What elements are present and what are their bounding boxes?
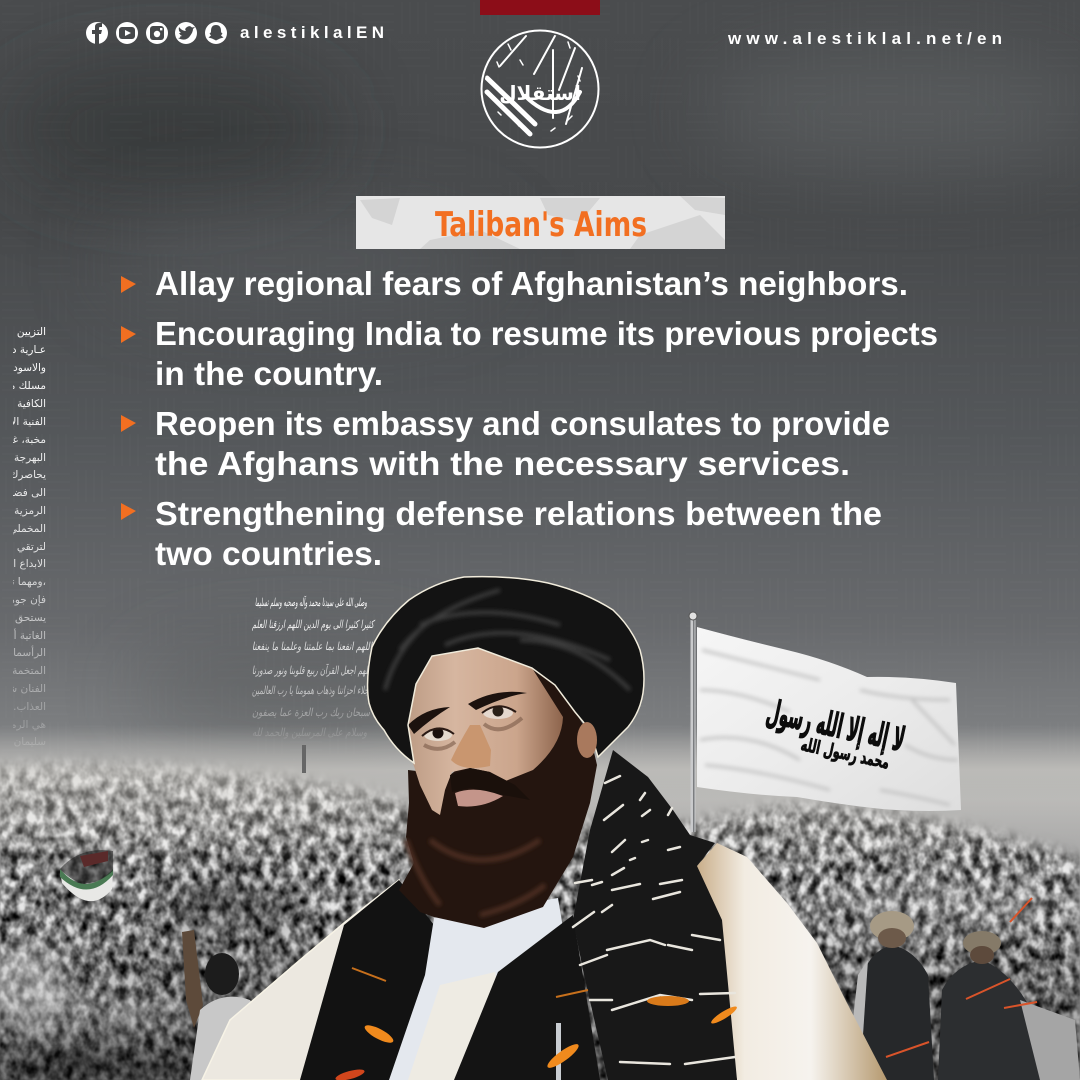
white flag cloth (697, 627, 961, 811)
lips (455, 790, 503, 807)
left Arabic text column (13, 327, 46, 746)
left eye (422, 728, 455, 749)
right eyebrow (468, 692, 527, 710)
left Arabic text column: الى فضا م (1, 487, 46, 499)
crowd photo in grayscale (0, 725, 1080, 1080)
shirt placket (408, 972, 500, 1080)
left Arabic text column: الكافية لمو (0, 398, 46, 410)
black vest left (300, 880, 434, 1080)
figure: man with cap, far right (938, 931, 1080, 1080)
bullet 3: Reopen its embassy and consulates to provide (155, 405, 890, 442)
handwritten Arabic calligraphy block: وسلام على المرسلين والحمد لله (252, 726, 367, 739)
turban (368, 577, 644, 763)
robe left shoulder (202, 880, 420, 1080)
text: وصلى الله على سيدنا محمد وآله وصحبه وسلم تسليما (255, 595, 367, 609)
left Arabic text column: العذاب. إن (0, 701, 46, 713)
logo: round Arabic calligraphy seal: استقلال (499, 81, 581, 105)
black vest right (454, 915, 600, 1080)
left Arabic text column: هي الرمز (4, 719, 46, 731)
icon: facebook (86, 22, 108, 44)
left Arabic text column: والاسود... (3, 362, 46, 374)
vest pen pocket (556, 1023, 561, 1080)
robe right shoulder (697, 843, 887, 1080)
flag pole (689, 612, 697, 832)
handwritten Arabic calligraphy block: كثيرا كثيرا الى يوم الدين اللهم ارزقنا العلم (252, 618, 376, 631)
bullet 2 (121, 315, 938, 392)
ear (577, 722, 597, 758)
left Arabic text column: فإن جوهر (2, 594, 46, 606)
flag shahada calligraphy: لا إله إلا الله رسول (763, 693, 908, 760)
flag on pole (689, 612, 961, 832)
figure: man at left (190, 953, 262, 1080)
crowd flag (60, 850, 113, 901)
left Arabic text column: عـارية دو (6, 344, 46, 356)
left Arabic text column: ،ومهما تعـ (2, 576, 46, 588)
face skin (408, 648, 563, 815)
left Arabic text column: مخبة، غامـ (0, 434, 46, 446)
handwritten Arabic calligraphy block: وجلاء احزاننا وذهاب همومنا يا رب العالمين (252, 684, 372, 697)
icon: youtube (116, 22, 138, 44)
flag shahada calligraphy: محمد رسول الله (799, 733, 892, 773)
right eye (482, 706, 522, 729)
bullet 3: the Afghans with the necessary services. (155, 445, 850, 482)
red top tab (480, 0, 600, 15)
foreground figures in crowd (190, 911, 1080, 1080)
heading text: Taliban's Aims (435, 205, 647, 245)
bullet 2: in the country. (155, 355, 383, 392)
left eyebrow (408, 707, 450, 734)
shirt (389, 898, 575, 1080)
figure: man with hat, right (846, 911, 934, 1080)
icon: snapchat (205, 22, 227, 44)
icon: instagram (146, 22, 168, 44)
handwritten Arabic calligraphy block: سبحان ربك رب العزة عما يصفون (252, 706, 371, 719)
left Arabic text column: التزيين الل (0, 326, 46, 338)
scarf (573, 750, 737, 1080)
bullet list (121, 265, 938, 572)
bullet 4 (121, 495, 882, 572)
social handle row (86, 22, 384, 44)
left Arabic text column: الرأسمالي (1, 645, 46, 659)
beard (399, 668, 597, 928)
panel: heading label (356, 196, 725, 249)
nose (451, 725, 491, 768)
bullet 2: Encouraging India to resume its previous projects (155, 315, 938, 352)
bullet 4: two countries. (155, 535, 382, 572)
orange sparks (334, 898, 1037, 1080)
man portrait (202, 577, 887, 1080)
handwritten Arabic calligraphy block: اللهم اجعل القرآن ربيع قلوبنا ونور صدورنا (252, 663, 373, 677)
logo: round Arabic calligraphy seal (482, 30, 598, 148)
website url: www.alestiklal.net/en (727, 29, 1002, 48)
left Arabic text column: الفنية الاجا (1, 416, 46, 428)
wooden pole in crowd (182, 930, 203, 1028)
icon: twitter (175, 22, 197, 44)
left Arabic text column: الغاتية أو (8, 628, 46, 642)
bullet 3 (121, 405, 890, 482)
handle text: alestiklalEN (240, 23, 384, 42)
left Arabic text column: يستحق ا (9, 612, 46, 624)
handwritten Arabic calligraphy block (252, 595, 376, 739)
left Arabic text column: لترتقي الم (0, 541, 46, 553)
left Arabic text column: مسلك ميـ (2, 380, 46, 392)
moustache (450, 768, 530, 800)
bullet 4: Strengthening defense relations between the (155, 495, 882, 532)
bullet 1: Allay regional fears of Afghanistan’s neighbors. (155, 265, 908, 302)
handwritten Arabic calligraphy block: اللهم انفعنا بما علمتنا وعلمنا ما ينفعنا (252, 640, 373, 653)
